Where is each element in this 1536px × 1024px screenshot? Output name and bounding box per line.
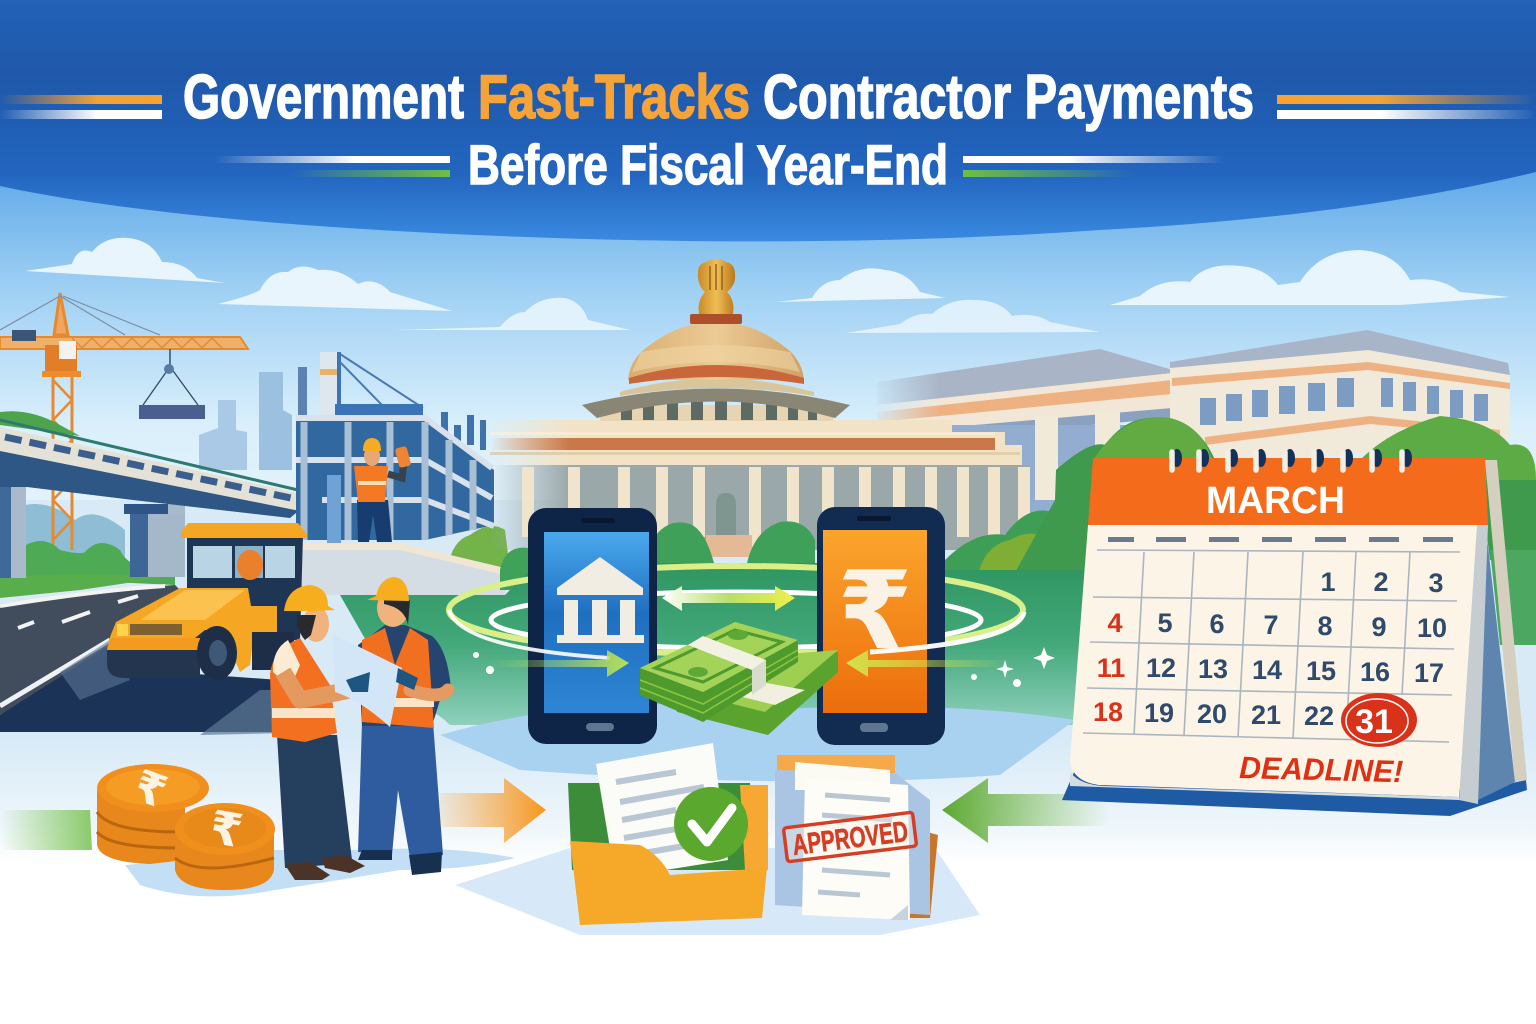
calendar dates: 4 xyxy=(1107,608,1123,638)
calendar dates: 12 xyxy=(1146,653,1176,683)
road roller xyxy=(107,523,307,680)
calendar header xyxy=(1088,458,1488,525)
calendar dates: 14 xyxy=(1252,655,1282,685)
calendar dates xyxy=(1093,567,1447,731)
arrow: coins left fade xyxy=(0,810,92,850)
calendar dates: 19 xyxy=(1144,698,1174,728)
flyover bridge xyxy=(0,411,316,578)
left coin stack xyxy=(97,761,209,864)
crane xyxy=(0,293,248,550)
calendar dates: 18 xyxy=(1093,697,1123,727)
orange folder tab xyxy=(740,785,768,870)
calendar rear leaf xyxy=(1485,460,1527,782)
right green lawn xyxy=(1490,550,1536,645)
calendar dates: 10 xyxy=(1417,613,1447,643)
concrete platform xyxy=(300,543,505,595)
background skyline xyxy=(25,372,292,575)
left coin stack: ₹ xyxy=(127,761,173,818)
calendar dates: 8 xyxy=(1317,611,1333,641)
drum xyxy=(107,638,200,678)
calendar dates: 7 xyxy=(1263,610,1279,640)
wheel xyxy=(197,626,237,680)
orbit ring front xyxy=(449,610,1024,658)
right phone xyxy=(817,507,945,745)
hood xyxy=(108,588,277,672)
ground highlight under phones xyxy=(440,704,1075,781)
calendar dates: 22 xyxy=(1304,701,1334,731)
header banner xyxy=(0,0,1536,241)
arrow: orange to folder xyxy=(440,778,546,843)
blueprint xyxy=(333,634,402,727)
national emblem finial xyxy=(698,259,735,314)
hard hat xyxy=(284,585,335,611)
dome xyxy=(628,314,804,384)
dome canopy xyxy=(582,378,850,421)
bridge pillars xyxy=(0,478,185,578)
calendar page xyxy=(1070,525,1477,797)
parliament building xyxy=(490,259,1030,557)
orbit ring back xyxy=(449,566,1023,654)
stacked approved documents xyxy=(775,755,938,920)
colonnade xyxy=(490,465,1030,557)
roof xyxy=(181,523,307,538)
worker ground shadow xyxy=(125,849,515,896)
calendar dates: 13 xyxy=(1198,654,1228,684)
calendar dates: 1 xyxy=(1320,567,1336,597)
green check badge xyxy=(674,787,748,861)
month label: MARCH xyxy=(1206,480,1345,522)
roadway xyxy=(0,585,190,715)
left phone xyxy=(528,508,657,744)
calendar dates: 21 xyxy=(1251,700,1281,730)
icon: bank xyxy=(557,557,644,643)
calendar grid xyxy=(1083,550,1460,742)
calendar dates: 2 xyxy=(1373,567,1389,597)
hard hat xyxy=(367,577,409,601)
calendar dates: 20 xyxy=(1197,699,1227,729)
entablature xyxy=(490,420,1022,465)
cabin xyxy=(187,535,303,640)
fresh asphalt xyxy=(0,645,290,732)
subtitle: Before Fiscal Year-End xyxy=(468,133,948,196)
road xyxy=(0,585,290,735)
arrow: into cash left xyxy=(490,650,629,677)
sparkles xyxy=(473,647,1055,687)
invoice paper xyxy=(596,743,728,878)
arrow: two-way transfer xyxy=(662,586,795,611)
approved stamp xyxy=(783,812,917,863)
green folder back xyxy=(568,783,755,870)
tree behind calendar right xyxy=(1360,416,1536,560)
sky background xyxy=(0,170,1536,510)
pond area xyxy=(340,563,1100,725)
arrow: green to documents xyxy=(942,778,1110,843)
title decoration lines xyxy=(0,95,1536,177)
trees behind phones xyxy=(500,500,1095,610)
right coin stack xyxy=(175,801,275,890)
icon: rupee: ₹ xyxy=(837,550,913,671)
calendar dates: 17 xyxy=(1414,658,1444,688)
calendar dates: 16 xyxy=(1360,657,1390,687)
folder front xyxy=(570,841,767,925)
tree beside building xyxy=(447,526,510,570)
calendar dates: 3 xyxy=(1428,568,1444,598)
bridge embankment xyxy=(0,411,80,436)
weekday dashes xyxy=(1108,537,1453,542)
deadline circled date: 31 xyxy=(1355,703,1393,741)
approved folder and documents xyxy=(568,743,938,925)
calendar xyxy=(1060,449,1527,816)
green hills left xyxy=(0,541,175,598)
parliament backdrop: right wing xyxy=(877,330,1510,513)
calendar base xyxy=(1060,770,1527,816)
worker one xyxy=(270,585,365,880)
cash bundles xyxy=(640,622,838,735)
spiral holes xyxy=(1172,449,1412,467)
coin stacks xyxy=(97,761,275,890)
calendar dates: 15 xyxy=(1306,656,1336,686)
tree behind calendar left xyxy=(1000,417,1215,600)
calendar dates: 9 xyxy=(1371,612,1387,642)
worker two xyxy=(358,577,451,875)
calendar dates: 5 xyxy=(1157,608,1173,638)
calendar dates: 6 xyxy=(1209,609,1225,639)
right coin stack: ₹ xyxy=(206,801,246,857)
top stack xyxy=(640,622,798,722)
ground background xyxy=(0,500,1536,1024)
title: Fast-Tracks xyxy=(478,63,750,132)
deadline label: DEADLINE! xyxy=(1239,750,1404,789)
document area shadow xyxy=(455,848,980,935)
approved stamp: APPROVED xyxy=(791,816,910,862)
spiral rings xyxy=(1172,452,1402,470)
clouds xyxy=(25,238,1510,333)
title: Contractor Payments xyxy=(763,63,1254,132)
bottom stack xyxy=(677,650,838,735)
title xyxy=(183,63,1254,132)
title: Government xyxy=(183,63,464,132)
deadline circled date xyxy=(1341,693,1417,747)
building under construction xyxy=(296,352,494,543)
arrow: into cash right xyxy=(846,650,1010,677)
calendar dates: 11 xyxy=(1097,653,1125,683)
worker on building xyxy=(354,438,411,542)
workers group xyxy=(270,577,451,880)
gloves xyxy=(346,668,418,692)
